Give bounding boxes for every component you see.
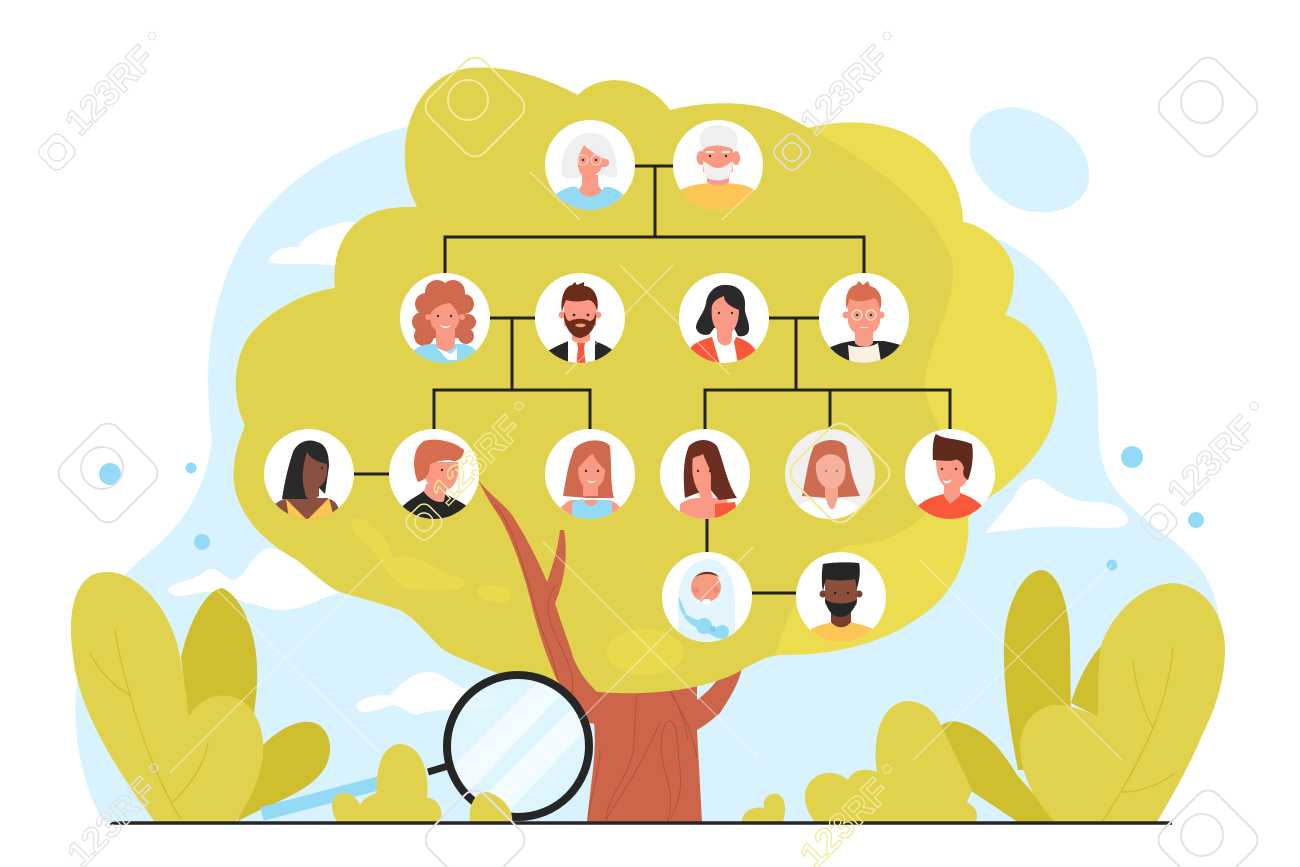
avatar: swaddled baby — [662, 552, 752, 647]
watermark: top left: 123RF — [57, 37, 162, 143]
avatar: woman with auburn hair — [785, 429, 875, 524]
avatar: ginger man with glasses — [819, 273, 909, 368]
avatar: dark-skinned woman — [264, 429, 354, 524]
watermark: center: 123RF — [424, 407, 529, 513]
watermark: top center: 123RF — [792, 37, 897, 143]
watermark: center — [403, 402, 529, 543]
watermark: top left — [36, 32, 162, 173]
left main branch — [478, 480, 600, 725]
avatar: curly red-haired woman — [400, 273, 490, 368]
canopy highlights — [352, 518, 683, 675]
background blue blob — [75, 125, 1221, 822]
clouds — [167, 222, 1128, 715]
avatar: grandfather — [673, 120, 763, 215]
avatar: dark-haired woman — [679, 273, 769, 368]
top right blue blob — [969, 107, 1089, 212]
avatar: red-haired girl in blue top — [545, 429, 635, 524]
lens flare lines — [170, 172, 1122, 773]
canopy darker area — [234, 68, 953, 693]
tree trunk — [587, 667, 742, 822]
blue dots — [99, 446, 1204, 570]
avatar: bearded man in suit — [535, 273, 625, 368]
avatar: ginger man in black shirt — [389, 429, 479, 524]
family connector lines — [354, 166, 950, 593]
left plant — [71, 572, 330, 822]
watermark: right: 123RF — [1159, 407, 1264, 513]
ground line — [110, 821, 1172, 825]
avatar: grandmother — [545, 120, 635, 215]
watermark: right — [1138, 402, 1264, 543]
avatar: brunette woman — [660, 429, 750, 524]
watermark: top center — [771, 32, 897, 173]
tree canopy — [234, 68, 1057, 693]
magnifying glass — [262, 675, 595, 817]
avatar: man in red shirt — [905, 429, 995, 524]
ground bushes — [332, 701, 977, 822]
watermark logos on canopy — [420, 52, 895, 528]
right plant — [931, 570, 1225, 822]
avatar: Black man with beard — [796, 552, 886, 647]
